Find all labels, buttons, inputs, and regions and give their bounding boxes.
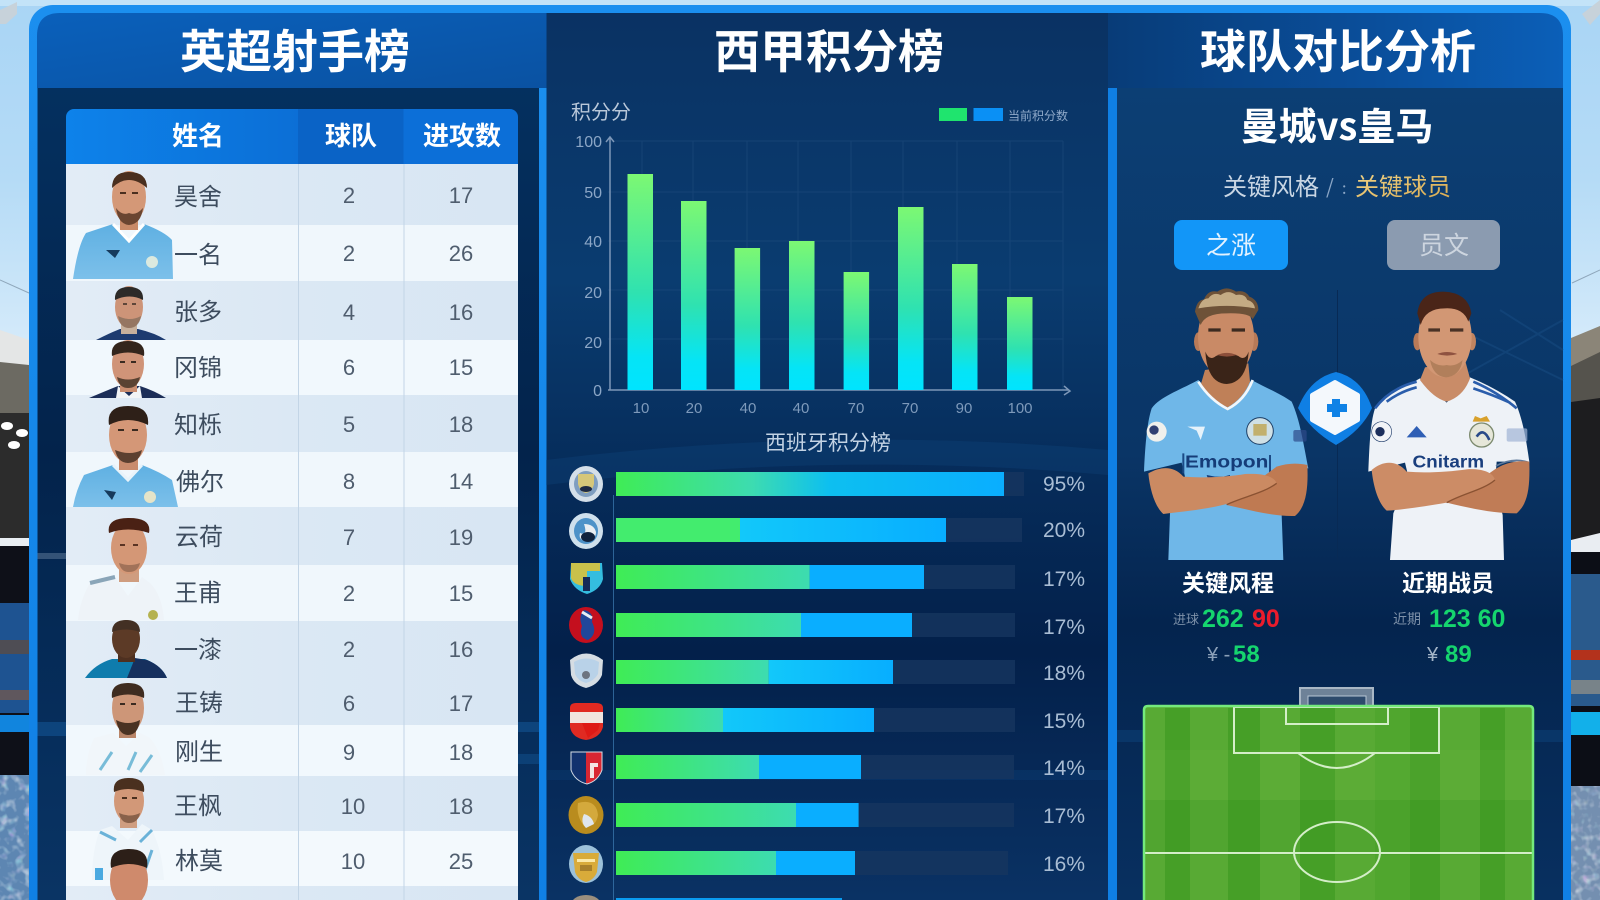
player names: 佛尔 (176, 462, 224, 497)
goal numbers: 15 (449, 355, 473, 380)
y axis labels: 40 (584, 234, 602, 251)
left stats: 90 (1252, 605, 1280, 633)
avatar: player 1 (73, 171, 173, 279)
y axis labels: 20 (584, 285, 602, 302)
bar chart (571, 96, 1070, 417)
avatar: player 4 (73, 406, 178, 507)
team numbers: 5 (343, 412, 355, 437)
badge 1 (569, 466, 603, 502)
y axis labels: 50 (584, 185, 602, 202)
player: Man City (1144, 288, 1308, 560)
axes (606, 137, 1070, 395)
panel: 英超射手榜 (37, 13, 547, 900)
panel header (1108, 13, 1563, 88)
avatar: player 5 (78, 518, 164, 620)
x axis labels: 70 (902, 400, 918, 417)
goal numbers: 18 (449, 412, 473, 437)
goal numbers: 14 (449, 469, 473, 494)
goal numbers: 18 (449, 794, 473, 819)
player names: 昊舍 (174, 177, 222, 212)
panel body (1117, 88, 1563, 900)
avatar: player 3 (89, 340, 166, 398)
row 10 (616, 898, 842, 900)
goal numbers: 25 (449, 849, 473, 874)
y axis labels: 20 (584, 335, 602, 352)
left stats (1173, 564, 1280, 668)
row 3 (616, 565, 1085, 591)
player names: 知栎 (174, 405, 222, 440)
icon: versus badge (1298, 372, 1372, 445)
row 8: 17% (1043, 805, 1085, 828)
avatar: player 8 (92, 778, 164, 880)
right stats: 近期战员 (1402, 564, 1494, 598)
team numbers: 6 (343, 355, 355, 380)
badge 6 (570, 703, 603, 740)
player names: 冈锦 (174, 348, 222, 383)
player names: 一漆 (174, 630, 222, 665)
avatar: player 6 (85, 620, 167, 678)
team numbers: 7 (343, 525, 355, 550)
right stats (1393, 564, 1505, 668)
left stats: 58 (1233, 641, 1260, 668)
player names: 刚生 (175, 732, 223, 767)
goal numbers: 18 (449, 740, 473, 765)
x axis labels: 100 (1007, 400, 1033, 417)
player: Man City: Emopon (1185, 451, 1268, 471)
key labels (1223, 167, 1451, 202)
button: left (1174, 220, 1288, 270)
badge 8 (568, 796, 604, 834)
team numbers: 10 (341, 794, 365, 819)
goal numbers: 17 (449, 691, 473, 716)
right stats: 123 60 (1429, 605, 1505, 633)
goal numbers: 16 (449, 637, 473, 662)
left stats: 进球 (1173, 609, 1199, 628)
y axis labels (575, 134, 602, 400)
player names: 云荷 (175, 517, 223, 552)
panel header (37, 13, 547, 88)
row 9: 16% (1043, 853, 1085, 876)
button: right (1387, 220, 1500, 270)
key labels: / (1326, 171, 1334, 200)
player: Real Madrid: Cnitarm (1412, 451, 1484, 471)
team badges (568, 466, 604, 900)
player names: 王枫 (174, 786, 222, 821)
table header: 姓名 (172, 116, 224, 153)
player names: 王甫 (174, 573, 222, 608)
chart legend: 当前积分数 (1008, 107, 1068, 124)
vertical bars (628, 174, 1032, 390)
y axis labels: 0 (593, 383, 602, 400)
row 2: 20% (1043, 519, 1085, 542)
team numbers: 2 (343, 581, 355, 606)
pitch (1144, 688, 1533, 900)
goal numbers: 15 (449, 581, 473, 606)
panel: 西甲积分榜 (546, 13, 1108, 900)
left stats: 关键风程 (1182, 564, 1274, 598)
key labels: 关键风格 (1223, 167, 1319, 202)
row 2 (616, 518, 1085, 542)
badge 3 (570, 563, 603, 594)
x axis labels (633, 400, 1033, 417)
badge 9 (569, 845, 603, 883)
key labels: : (1342, 175, 1346, 199)
key labels: 关键球员 (1355, 167, 1451, 202)
row 6: 15% (1043, 710, 1085, 733)
badge 4 (569, 607, 603, 643)
row 7 (616, 755, 1085, 780)
row 9 (616, 851, 1085, 876)
right stats: 近期 (1393, 609, 1421, 629)
x axis labels: 70 (848, 400, 864, 417)
x axis labels: 40 (793, 400, 809, 417)
badge 7 (571, 752, 602, 784)
goal numbers (449, 183, 473, 874)
avatar: player 2 (96, 286, 166, 340)
x axis labels: 20 (686, 400, 702, 417)
team numbers: 2 (343, 183, 355, 208)
x axis labels: 10 (633, 400, 649, 417)
table rows (66, 164, 518, 900)
player names (174, 177, 224, 876)
table (66, 109, 518, 900)
team numbers: 2 (343, 241, 355, 266)
badge 5 (570, 654, 603, 688)
horizontal progress bars (616, 472, 1085, 900)
table header: 球队 (325, 116, 377, 153)
player names: 张多 (174, 292, 222, 327)
panel body (38, 88, 539, 900)
heading: 西甲积分榜 (714, 16, 944, 82)
table header (66, 109, 518, 164)
avatar: player 9 (110, 849, 148, 900)
right stats: ¥ (1426, 644, 1439, 666)
left stats: 262 (1202, 605, 1244, 633)
sub heading: 西班牙积分榜 (765, 427, 891, 457)
team numbers: 10 (341, 849, 365, 874)
x axis labels: 90 (956, 400, 972, 417)
row 5 (616, 660, 1085, 685)
player: Real Madrid (1368, 292, 1529, 560)
team numbers: 9 (343, 740, 355, 765)
row 7: 14% (1043, 757, 1085, 780)
row 8 (616, 803, 1085, 828)
team numbers (341, 183, 365, 874)
left stats: ¥ - (1206, 644, 1230, 666)
goal numbers: 19 (449, 525, 473, 550)
row 5: 18% (1043, 662, 1085, 685)
row 4 (616, 613, 1085, 639)
x axis labels: 40 (740, 400, 756, 417)
avatar: player 7 (86, 683, 165, 775)
right stats: 89 (1445, 641, 1472, 668)
row 1 (616, 472, 1085, 496)
player names: 王铸 (175, 683, 223, 718)
heading: 球队对比分析 (1200, 16, 1476, 82)
row 3: 17% (1043, 568, 1085, 591)
goal (1300, 688, 1373, 708)
row 1: 95% (1043, 473, 1085, 496)
matchup title: 曼城vs皇马 (1241, 96, 1433, 151)
row 6 (616, 708, 1085, 733)
goal numbers: 26 (449, 241, 473, 266)
pitch markings (1144, 707, 1533, 882)
chart legend (939, 107, 1068, 124)
goal numbers: 16 (449, 300, 473, 325)
player names: 林莫 (175, 841, 223, 876)
button: left: 之涨 (1206, 226, 1256, 262)
badge 10 (571, 895, 601, 900)
row 4: 17% (1043, 616, 1085, 639)
chart y title: 积分分 (571, 96, 631, 125)
button: right: 员文 (1419, 226, 1469, 262)
panel background (546, 13, 1108, 900)
badge 2 (569, 513, 603, 549)
team numbers: 8 (343, 469, 355, 494)
y axis labels: 100 (575, 134, 602, 151)
team numbers: 6 (343, 691, 355, 716)
panel: 球队对比分析 (1108, 13, 1563, 900)
team numbers: 2 (343, 637, 355, 662)
team numbers: 4 (343, 300, 355, 325)
heading: 英超射手榜 (180, 16, 410, 82)
table header: 进攻数 (423, 116, 501, 153)
goal numbers: 17 (449, 183, 473, 208)
player names: 一名 (174, 235, 222, 270)
